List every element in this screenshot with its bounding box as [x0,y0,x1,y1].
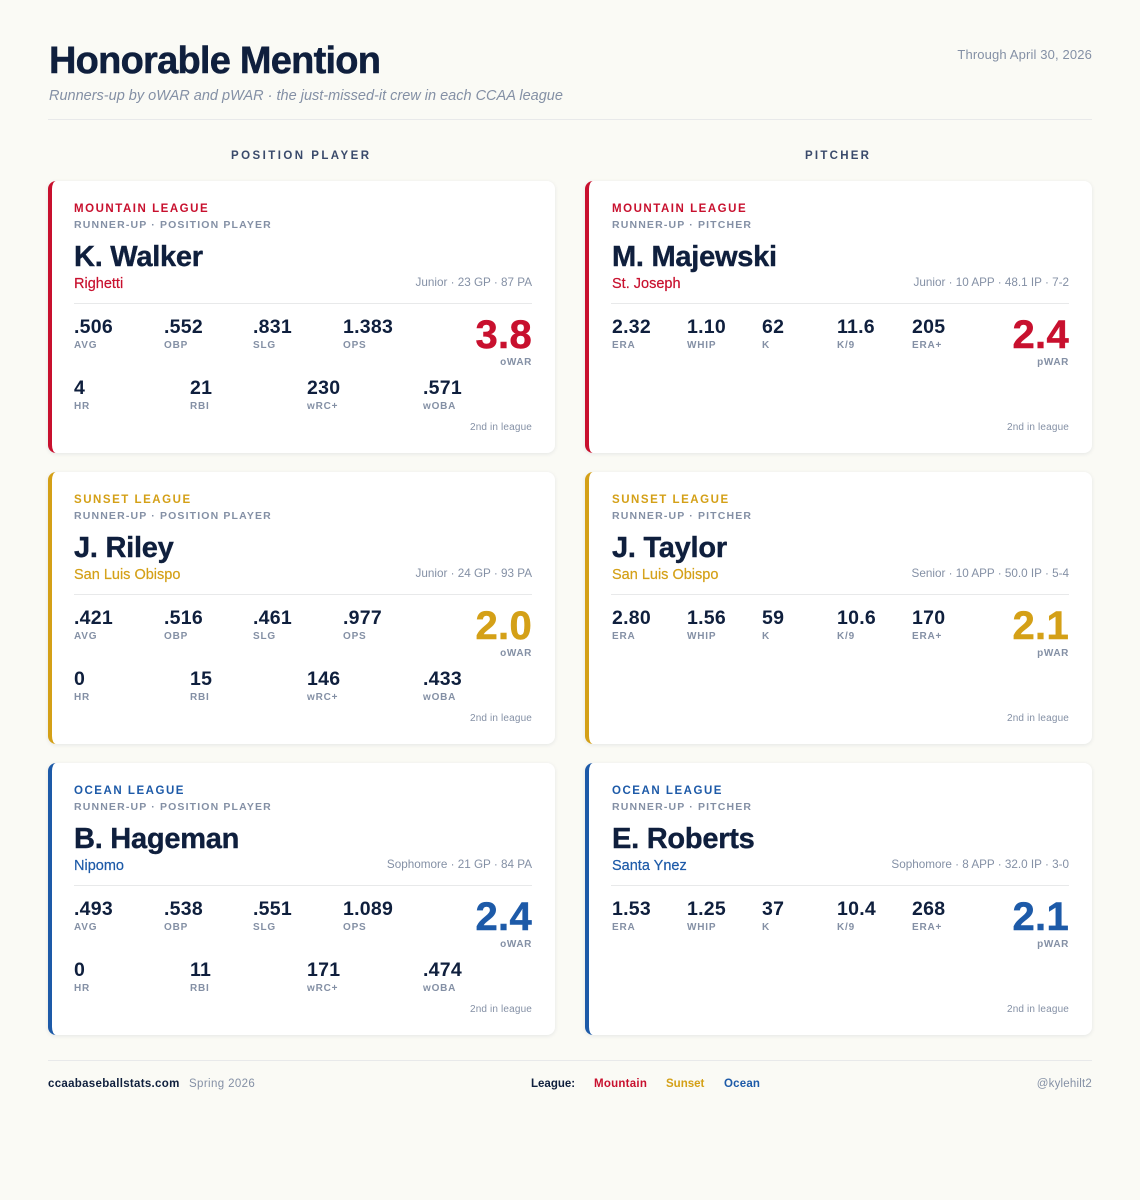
stat: K: K [762,340,770,351]
stat: ERA [612,898,651,933]
WAR callout: 2.1 [1012,895,1069,939]
footer: handle: @kylehilt2 [1037,1078,1092,1090]
league rank: 2nd in league [1007,422,1069,433]
WAR callout: 2.0 [475,604,532,648]
panel: J. Taylor [585,472,1092,744]
stat: HR: HR [74,692,90,703]
stat: ERA+: ERA+ [912,922,942,933]
stat: RBI: 15 [190,668,212,690]
stat: OPS: 1.089 [343,898,393,920]
player name: K. Walker [74,241,203,273]
player meta: Sophomore · 21 GP · 84 PA [387,858,532,871]
role label: RUNNER-UP · PITCHER [612,801,752,813]
league rank: 2nd in league [470,713,532,724]
stat: SLG: .831 [253,316,292,338]
stat: HR: HR [74,401,90,412]
role label: RUNNER-UP · POSITION PLAYER [74,801,272,813]
stat: K: K [762,922,770,933]
date note: Through April 30, 2026 [957,46,1092,62]
title: Honorable Mention [49,40,380,82]
WAR callout: 3.8 [475,313,532,357]
WAR callout: pWAR [1037,648,1069,659]
stat: wOBA: .433 [423,668,462,690]
player meta: Senior · 10 APP · 50.0 IP · 5-4 [912,567,1069,580]
stat: ERA: ERA [612,922,636,933]
stat: OPS [343,898,393,933]
stat: ERA+ [912,607,945,642]
stat: K/9 [837,316,875,351]
stat: OPS: .977 [343,607,382,629]
stat: WHIP: WHIP [687,340,716,351]
role label: RUNNER-UP · POSITION PLAYER [74,510,272,522]
stat: OPS: OPS [343,631,367,642]
stat: SLG: SLG [253,922,276,933]
stat: wRC+: wRC+ [307,983,338,994]
stat: HR [74,377,90,412]
player meta: Junior · 23 GP · 87 PA [416,276,532,289]
stat: ERA+ [912,899,982,943]
team: San Luis Obispo [74,567,180,583]
stat: wOBA [423,377,462,412]
stat: WHIP: WHIP [687,631,716,642]
stat: OBP: OBP [164,631,188,642]
stat: WHIP: WHIP [687,922,716,933]
panel: J. Riley [48,472,555,744]
stat: ERA [612,607,651,642]
stat: AVG: AVG [74,922,97,933]
stat: wRC+: wRC+ [307,401,338,412]
stat: SLG [253,607,292,642]
team: Nipomo [74,858,124,874]
stat: wRC+: 146 [307,668,340,690]
stat: K [762,899,832,943]
stat: SLG [253,316,292,351]
stat: K/9: K/9 [837,340,855,351]
stat: RBI [190,959,211,994]
panel: K. Walker [48,181,555,453]
stat: OBP: .516 [164,607,203,629]
legend title: League: [531,1078,575,1090]
column heading: position player: POSITION PLAYER [231,150,372,162]
stat: wRC+: 171 [307,959,340,981]
legend: Ocean: Ocean [724,1078,760,1090]
stat: HR [74,959,90,994]
stat: K/9: 10.4 [837,898,876,920]
stat: WHIP: 1.10 [687,316,726,338]
stat: SLG [253,898,292,933]
panel: E. Roberts [585,763,1092,1035]
player name: B. Hageman [74,823,239,855]
role label: RUNNER-UP · PITCHER [612,510,752,522]
legend: Mountain: Mountain [594,1078,647,1090]
panel: B. Hageman [48,763,555,1035]
stat: K/9 [837,607,876,642]
footer: season: Spring 2026 [189,1078,255,1090]
league label: OCEAN LEAGUE [612,785,723,797]
league label: SUNSET LEAGUE [612,494,730,506]
stat: K: 62 [762,316,784,338]
stat: AVG [74,898,113,933]
stat: OPS: OPS [343,340,367,351]
WAR callout: pWAR [1037,939,1069,950]
stat: WHIP [687,316,726,351]
stat: wOBA [423,668,462,703]
legend [531,1074,761,1094]
player name: E. Roberts [612,823,755,855]
WAR callout: 2.4 [475,895,532,939]
stat: AVG [74,316,113,351]
player meta: Junior · 24 GP · 93 PA [416,567,532,580]
subtitle: Runners-up by oWAR and pWAR · the just-missed-it crew in each CCAA league [49,88,563,104]
stat: WHIP [687,607,726,642]
stat: ERA [612,316,651,351]
stat: ERA+: ERA+ [912,631,942,642]
stat: AVG [74,607,113,642]
stat: ERA+: 205 [912,316,945,338]
stat: OBP: .552 [164,316,203,338]
stat: K/9 [837,899,907,943]
player name: M. Majewski [612,241,777,273]
league label: SUNSET LEAGUE [74,494,192,506]
stat: HR [74,668,90,703]
player name: J. Riley [74,532,174,564]
stat: RBI: 11 [190,959,211,981]
stat: K [762,607,784,642]
stat: AVG: AVG [74,631,97,642]
stat: wOBA: wOBA [423,692,456,703]
stat: K/9: 11.6 [837,316,875,338]
footer: site name: ccaabaseballstats.com [48,1078,180,1090]
stat: AVG: AVG [74,340,97,351]
stat: OPS: OPS [343,922,367,933]
stat: WHIP: 1.56 [687,607,726,629]
stat: ERA: ERA [612,340,636,351]
stat: wOBA: wOBA [423,983,456,994]
league rank: 2nd in league [1007,713,1069,724]
stat: AVG: .421 [74,607,113,629]
WAR callout: 2.1 [1012,604,1069,648]
stat: K/9: 10.6 [837,607,876,629]
stat: HR: 0 [74,668,85,690]
player name: J. Taylor [612,532,727,564]
league label: OCEAN LEAGUE [74,785,185,797]
stat: wOBA: .474 [423,959,462,981]
team: Santa Ynez [612,858,687,874]
stat: ERA: 1.53 [612,898,651,920]
stat: SLG: .461 [253,607,292,629]
league rank: 2nd in league [1007,1004,1069,1015]
stat: ERA: 2.32 [612,316,651,338]
stat: wRC+: 230 [307,377,340,399]
WAR callout: 2.4 [1012,313,1069,357]
stat: K/9: K/9 [837,922,855,933]
stat: K [762,316,784,351]
player meta: Junior · 10 APP · 48.1 IP · 7-2 [914,276,1069,289]
column heading: pitcher: PITCHER [805,150,871,162]
stat: K: 37 [762,898,784,920]
stat: K: K [762,631,770,642]
stat: RBI [190,377,212,412]
league label: MOUNTAIN LEAGUE [612,203,747,215]
stat: wRC+ [307,959,340,994]
stat: OBP: OBP [164,340,188,351]
stat: wRC+: wRC+ [307,692,338,703]
stat: SLG: SLG [253,631,276,642]
legend: Sunset: Sunset [666,1078,704,1090]
stat: AVG: .493 [74,898,113,920]
stat: HR: 0 [74,959,85,981]
stat: AVG: .506 [74,316,113,338]
stat: ERA: ERA [612,631,636,642]
team: San Luis Obispo [612,567,718,583]
role label: RUNNER-UP · POSITION PLAYER [74,219,272,231]
stat: RBI: RBI [190,692,210,703]
stat: HR: HR [74,983,90,994]
stat: OPS: 1.383 [343,316,393,338]
stat: OPS [343,316,393,351]
WAR callout: oWAR [500,357,532,368]
stat: ERA+: 170 [912,607,945,629]
stat: OBP: .538 [164,898,203,920]
stat: OBP [164,607,203,642]
league rank: 2nd in league [470,1004,532,1015]
team: Righetti [74,276,123,292]
stat: OBP [164,316,203,351]
panel: M. Majewski [585,181,1092,453]
stat: WHIP [687,899,757,943]
league rank: 2nd in league [470,422,532,433]
stat: K: 59 [762,607,784,629]
stat: OBP: OBP [164,922,188,933]
stat: RBI: RBI [190,401,210,412]
stat: HR: 4 [74,377,85,399]
stat: K/9: K/9 [837,631,855,642]
stat: OBP [164,898,203,933]
WAR callout: oWAR [500,648,532,659]
stat: RBI: RBI [190,983,210,994]
stat: wOBA: .571 [423,377,462,399]
stat: wRC+ [307,668,340,703]
WAR callout: pWAR [1037,357,1069,368]
WAR callout [979,897,1069,957]
stat: wOBA [423,959,462,994]
role label: RUNNER-UP · PITCHER [612,219,752,231]
stat: ERA+: 268 [912,898,945,920]
league label: MOUNTAIN LEAGUE [74,203,209,215]
stat: OPS [343,607,382,642]
stat: ERA+ [912,316,945,351]
WAR callout: oWAR [500,939,532,950]
player meta: Sophomore · 8 APP · 32.0 IP · 3-0 [891,858,1069,871]
stat: ERA: 2.80 [612,607,651,629]
stat: wRC+ [307,377,340,412]
stat: wOBA: wOBA [423,401,456,412]
stat: SLG: .551 [253,898,292,920]
stat: ERA+: ERA+ [912,340,942,351]
stat: RBI: 21 [190,377,212,399]
team: St. Joseph [612,276,681,292]
stat: SLG: SLG [253,340,276,351]
stat: RBI [190,668,212,703]
stat: WHIP: 1.25 [687,898,726,920]
